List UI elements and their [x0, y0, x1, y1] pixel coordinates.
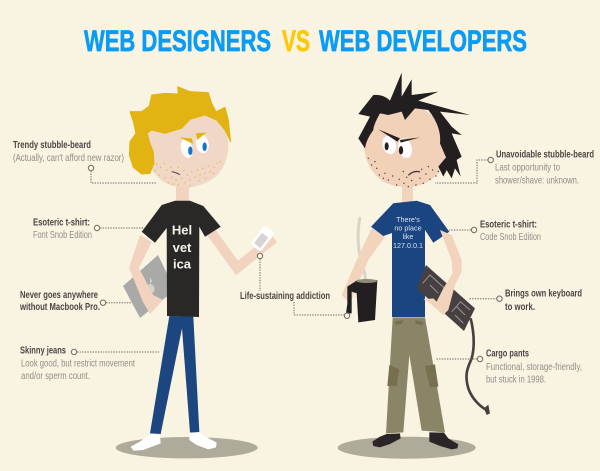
- callout: esoteric t-shirt developer: [449, 218, 541, 243]
- designer stubble: [154, 161, 221, 187]
- developer t-shirt: [371, 201, 449, 317]
- developer head: [358, 73, 470, 187]
- callout: trendy stubble-beard: Trendy stubble-beard: [13, 139, 91, 151]
- callout: macbook pro: Never goes anywhere: [20, 289, 98, 301]
- designer brows: [179, 137, 193, 144]
- designer left arm: [129, 235, 163, 314]
- callout: esoteric t-shirt developer: Code Snob Edition: [480, 231, 541, 243]
- designer head: [129, 87, 231, 188]
- title: WEB DEVELOPERS: [319, 25, 527, 58]
- developer t-shirt: 127.0.0.1: [393, 241, 423, 250]
- designer phone: [250, 225, 275, 252]
- callout: esoteric t-shirt designer: Esoteric t-shirt:: [33, 216, 90, 228]
- designer mouth: [172, 172, 180, 175]
- callout: skinny jeans: Skinny jeans: [20, 344, 66, 356]
- callout: trendy stubble-beard: [13, 139, 157, 183]
- web designer character: [123, 87, 275, 451]
- developer eyes: [380, 134, 398, 156]
- callout: life-sustaining addiction: [240, 253, 350, 318]
- designer laptop: [123, 255, 175, 318]
- callout: esoteric t-shirt designer: Font Snob Edition: [33, 229, 92, 241]
- callout: esoteric t-shirt developer: Esoteric t-shirt:: [480, 218, 537, 230]
- designer neck: [176, 185, 189, 203]
- developer mouth: [408, 171, 420, 175]
- designer t-shirt: Hel: [172, 222, 192, 238]
- designer right arm: [211, 232, 274, 268]
- callout: keyboard: to work.: [505, 301, 535, 313]
- developer stubble: [368, 158, 439, 187]
- developer t-shirt: There's: [396, 215, 420, 224]
- developer pants: [386, 317, 445, 433]
- ground shadow: developer: [338, 437, 476, 459]
- callout: trendy stubble-beard: (Actually, can't afford new razor): [13, 152, 124, 164]
- title: VS: [282, 25, 310, 58]
- developer shoes: [372, 432, 458, 449]
- developer steam: [358, 217, 365, 282]
- designer t-shirt: ica: [173, 256, 192, 272]
- title: [84, 25, 527, 58]
- designer t-shirt: vet: [173, 240, 192, 255]
- developer coffee mug: [346, 279, 377, 322]
- callout: keyboard: [469, 288, 582, 313]
- designer legs: skinny jeans: [150, 316, 199, 434]
- callout: esoteric t-shirt designer: [33, 216, 144, 241]
- designer eyes: [179, 138, 194, 159]
- callout: macbook pro: [19, 289, 131, 313]
- developer neck: [402, 183, 413, 203]
- developer right arm: [423, 230, 462, 315]
- developer hair: [358, 73, 470, 178]
- designer t-shirt: [142, 201, 221, 317]
- developer keyboard and cord: [417, 265, 490, 415]
- developer t-shirt: no place: [394, 224, 422, 232]
- callout: unavoidable stubble-beard: [435, 149, 594, 186]
- callout: cargo pants: [436, 348, 582, 386]
- callout: life-sustaining addiction: Life-sustaining addiction: [240, 290, 330, 302]
- developer t-shirt: like: [403, 232, 413, 241]
- callout: cargo pants: Cargo pants: [486, 348, 529, 360]
- title: WEB DESIGNERS: [84, 25, 271, 58]
- callout: skinny jeans: [20, 344, 160, 382]
- callout: skinny jeans: Look good, but restrict movement: [21, 358, 135, 370]
- ground shadow: designer: [116, 437, 258, 458]
- callout: skinny jeans: and/or sperm count.: [21, 370, 90, 382]
- web developer character: [342, 73, 490, 449]
- developer left arm: [342, 228, 385, 303]
- developer brows: [378, 129, 400, 142]
- callout: macbook pro: without Macbook Pro.: [19, 301, 100, 313]
- callout: unavoidable stubble-beard: Last opportunity to: [495, 162, 560, 174]
- callout: cargo pants: but stuck in 1998.: [486, 374, 546, 386]
- designer hair: [129, 87, 231, 174]
- designer shoes: [131, 433, 217, 451]
